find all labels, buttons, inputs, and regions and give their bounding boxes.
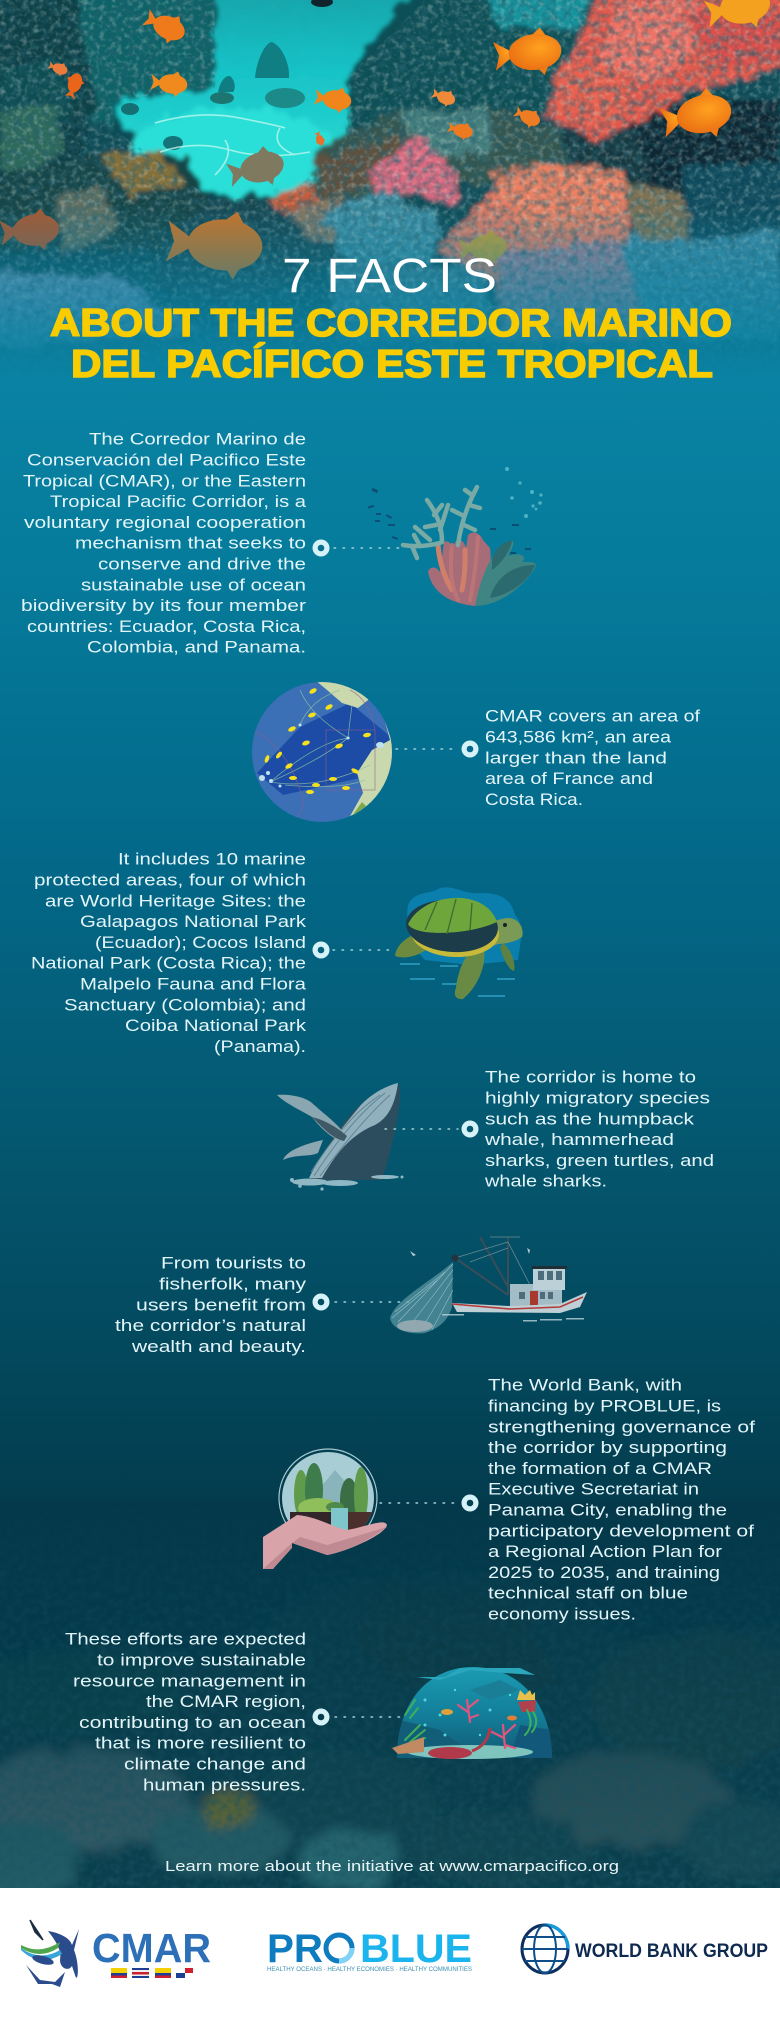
logo: PROBLUE: PR [267, 1927, 323, 1971]
connector: fact 6 [380, 1494, 478, 1512]
text block: fact 7: that is more resilient to [95, 1735, 306, 1753]
text block: fact 4: The corridor is home to [485, 1069, 696, 1087]
connector: fact 3 [312, 942, 395, 958]
text block: fact 1: countries: Ecuador, Costa Rica, [27, 618, 306, 636]
text block: fact 6: 2025 to 2035, and training [488, 1564, 720, 1582]
heading: 7 facts: 7 FACTS [282, 250, 497, 303]
logo: CMAR [21, 1920, 211, 1987]
footer: logo strip [0, 1888, 780, 2017]
text block: fact 4: sharks, green turtles, and [485, 1152, 714, 1170]
text block: fact 7: human pressures. [143, 1776, 306, 1794]
text block: fact 2 [485, 708, 700, 809]
text block: fact 2: 643,586 km², an area [485, 728, 672, 746]
text block: fact 6: strengthening governance of [488, 1418, 756, 1436]
icon: hand holding a small world [263, 1449, 387, 1569]
teal fade over hero [0, 205, 780, 386]
text block: fact 3: (Panama). [214, 1038, 306, 1056]
logo: PROBLUE [267, 1927, 473, 1973]
text block: fact 3: National Park (Costa Rica); the [31, 955, 306, 973]
text block: fact 1: conserve and drive the [98, 556, 306, 574]
icon: reef dome [392, 1667, 552, 1759]
text block: fact 2: Costa Rica. [485, 791, 583, 809]
text block: fact 7 [65, 1631, 306, 1794]
text block: fact 4: highly migratory species [485, 1090, 710, 1108]
text block: fact 1: voluntary regional cooperation [24, 514, 306, 532]
text block: fact 7: resource management in [73, 1672, 306, 1690]
text block: fact 1: The Corredor Marino de [89, 431, 306, 449]
icon: fishing boat with net [390, 1237, 587, 1333]
text block: fact 2: CMAR covers an area of [485, 708, 700, 726]
text block: fact 6: a Regional Action Plan for [488, 1543, 723, 1561]
icon: green sea turtle [395, 887, 523, 999]
text block: fact 3: Sanctuary (Colombia); and [64, 996, 306, 1014]
text block: fact 1: Tropical Pacific Corridor, is a [50, 493, 307, 511]
icon: globe map of the corridor [252, 680, 395, 822]
text block: fact 7: to improve sustainable [97, 1652, 306, 1670]
connector: fact 7 [312, 1708, 405, 1726]
text block: fact 4: whale, hammerhead [484, 1131, 674, 1149]
reef speckle texture [0, 0, 780, 340]
title [50, 250, 732, 386]
text block: fact 7: These efforts are expected [65, 1631, 306, 1649]
text block: fact 2: area of France and [485, 770, 653, 788]
text block: fact 4: such as the humpback [485, 1110, 695, 1128]
fish school [0, 0, 775, 282]
text block: fact 5: the corridor’s natural [115, 1317, 306, 1335]
text block: fact 6: the formation of a CMAR [488, 1460, 712, 1478]
text block: fact 1: sustainable use of ocean [81, 576, 306, 594]
logo: CMAR: CMAR [92, 1925, 211, 1971]
text block: fact 6: Panama City, enabling the [488, 1502, 727, 1520]
icon: humpback whale [277, 1083, 404, 1191]
text block: fact 1: Colombia, and Panama. [87, 639, 306, 657]
text block: fact 3: Galapagos National Park [80, 913, 307, 931]
connector: fact 4 [385, 1120, 478, 1138]
text block: fact 6: economy issues. [488, 1606, 636, 1624]
text block: fact 1: Tropical (CMAR), or the Eastern [23, 472, 306, 490]
text block: fact 6: the corridor by supporting [488, 1439, 727, 1457]
text block: fact 6: The World Bank, with [488, 1377, 682, 1395]
hero photo: coral reef [0, 0, 780, 400]
text block: fact 3: Malpelo Fauna and Flora [80, 976, 307, 994]
text block: fact 3: Coiba National Park [125, 1017, 307, 1035]
connector: fact 2 [396, 740, 478, 758]
logo: World Bank Group [522, 1925, 768, 1973]
text block: fact 5 [115, 1255, 307, 1356]
ocean gradient [0, 380, 780, 1540]
text block: fact 4: whale sharks. [484, 1173, 607, 1191]
text block: fact 3 [31, 851, 307, 1056]
text block: fact 3: It includes 10 marine [118, 851, 306, 869]
text block: fact 3: are World Heritage Sites: the [45, 892, 306, 910]
text block: fact 6: financing by PROBLUE, is [488, 1398, 721, 1416]
connector: fact 5 [312, 1294, 412, 1310]
connector: fact 1 [312, 540, 405, 556]
footer note: Learn more about the initiative at www.cmarpacifico.org [165, 1858, 619, 1875]
text block: fact 1 [21, 431, 307, 657]
text block: fact 1: Conservación del Pacifico Este [27, 452, 306, 470]
icon: coral and seaweed [368, 467, 543, 606]
text block: fact 1: biodiversity by its four member [21, 597, 307, 615]
text block: fact 6 [488, 1377, 756, 1624]
text block: fact 5: fisherfolk, many [159, 1276, 307, 1294]
text block: fact 6: participatory development of [488, 1522, 755, 1540]
text block: fact 6: Executive Secretariat in [488, 1481, 699, 1499]
underwater rocks and caustics [121, 42, 310, 175]
text block: fact 7: climate change and [124, 1756, 306, 1774]
flags [111, 1968, 193, 1978]
text block: fact 7: contributing to an ocean [79, 1714, 306, 1732]
text block: fact 5: wealth and beauty. [131, 1338, 306, 1356]
text block: fact 2: larger than the land [485, 749, 667, 767]
heading: corridor name [50, 302, 732, 386]
text block: fact 5: From tourists to [161, 1255, 306, 1273]
logo: PROBLUE: BLUE [360, 1927, 472, 1971]
text block: fact 6: technical staff on blue [488, 1585, 688, 1603]
heading: corridor name: ABOUT THE CORREDOR MARINO [50, 302, 732, 345]
reef and water shapes [0, 0, 780, 348]
text block: fact 7: the CMAR region, [146, 1693, 306, 1711]
logo: PROBLUE: HEALTHY OCEANS · HEALTHY ECONOMIES · HEALTHY COMMUNITIES [267, 1966, 473, 1973]
text block: fact 3: protected areas, four of which [34, 872, 306, 890]
text block: fact 3: (Ecuador); Cocos Island [95, 934, 306, 952]
heading: corridor name: DEL PACÍFICO ESTE TROPICAL [71, 342, 713, 386]
text block: fact 4 [484, 1069, 714, 1191]
text block: fact 1: mechanism that seeks to [75, 535, 306, 553]
text block: fact 5: users benefit from [136, 1296, 306, 1314]
bottom faded coral photo [0, 1500, 780, 1900]
